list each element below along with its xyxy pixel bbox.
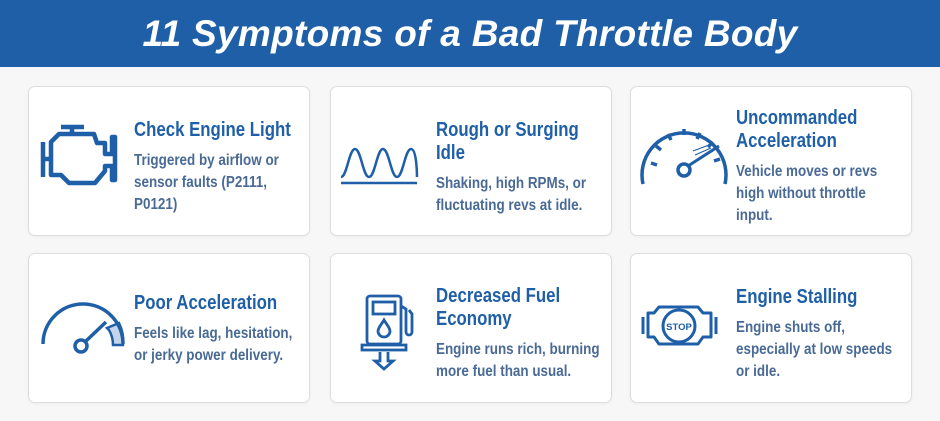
text block: [436, 119, 586, 214]
text block: Engine Stalling: [736, 286, 857, 308]
text block: Uncommanded Acceleration: [736, 107, 857, 152]
text block: [436, 285, 600, 380]
text block: Rough or Surging Idle: [436, 119, 579, 164]
text block: [736, 107, 877, 224]
text block: Decreased Fuel Economy: [436, 285, 560, 330]
title: 11 Symptoms of a Bad Throttle Body: [142, 13, 798, 54]
panel: uncommanded acceleration: [630, 86, 912, 236]
icon: gauge: [41, 302, 125, 354]
text block: [134, 119, 291, 213]
panel: fuel economy: [330, 253, 612, 403]
header banner: [0, 0, 940, 67]
icon: engine: [40, 124, 118, 186]
icon: speedometer: [640, 129, 728, 184]
text block: Poor Acceleration: [134, 292, 277, 314]
icon: wave: [341, 148, 418, 184]
text block: Check Engine Light: [134, 119, 291, 141]
panel: check engine light: [28, 86, 310, 236]
text block: Triggered by airflow or sensor faults (P2111, P0121): [134, 152, 279, 213]
text block: Engine shuts off, especially at low speeds or idle.: [736, 319, 892, 380]
text block: Feels like lag, hesitation, or jerky power delivery.: [134, 325, 292, 364]
panel: engine stalling: [630, 253, 912, 403]
panel: rough idle: [330, 86, 612, 236]
icon: fuel pump: [360, 294, 414, 371]
text block: [736, 286, 892, 380]
text block: [134, 292, 292, 364]
icon: stop engine: [642, 306, 718, 346]
icon: stop engine: STOP: [666, 322, 693, 333]
panel: poor acceleration: [28, 253, 310, 403]
text block: Vehicle moves or revs high without throttle input.: [736, 163, 877, 224]
text block: Shaking, high RPMs, or fluctuating revs at idle.: [436, 175, 586, 214]
text block: Engine runs rich, burning more fuel than usual.: [436, 341, 600, 380]
